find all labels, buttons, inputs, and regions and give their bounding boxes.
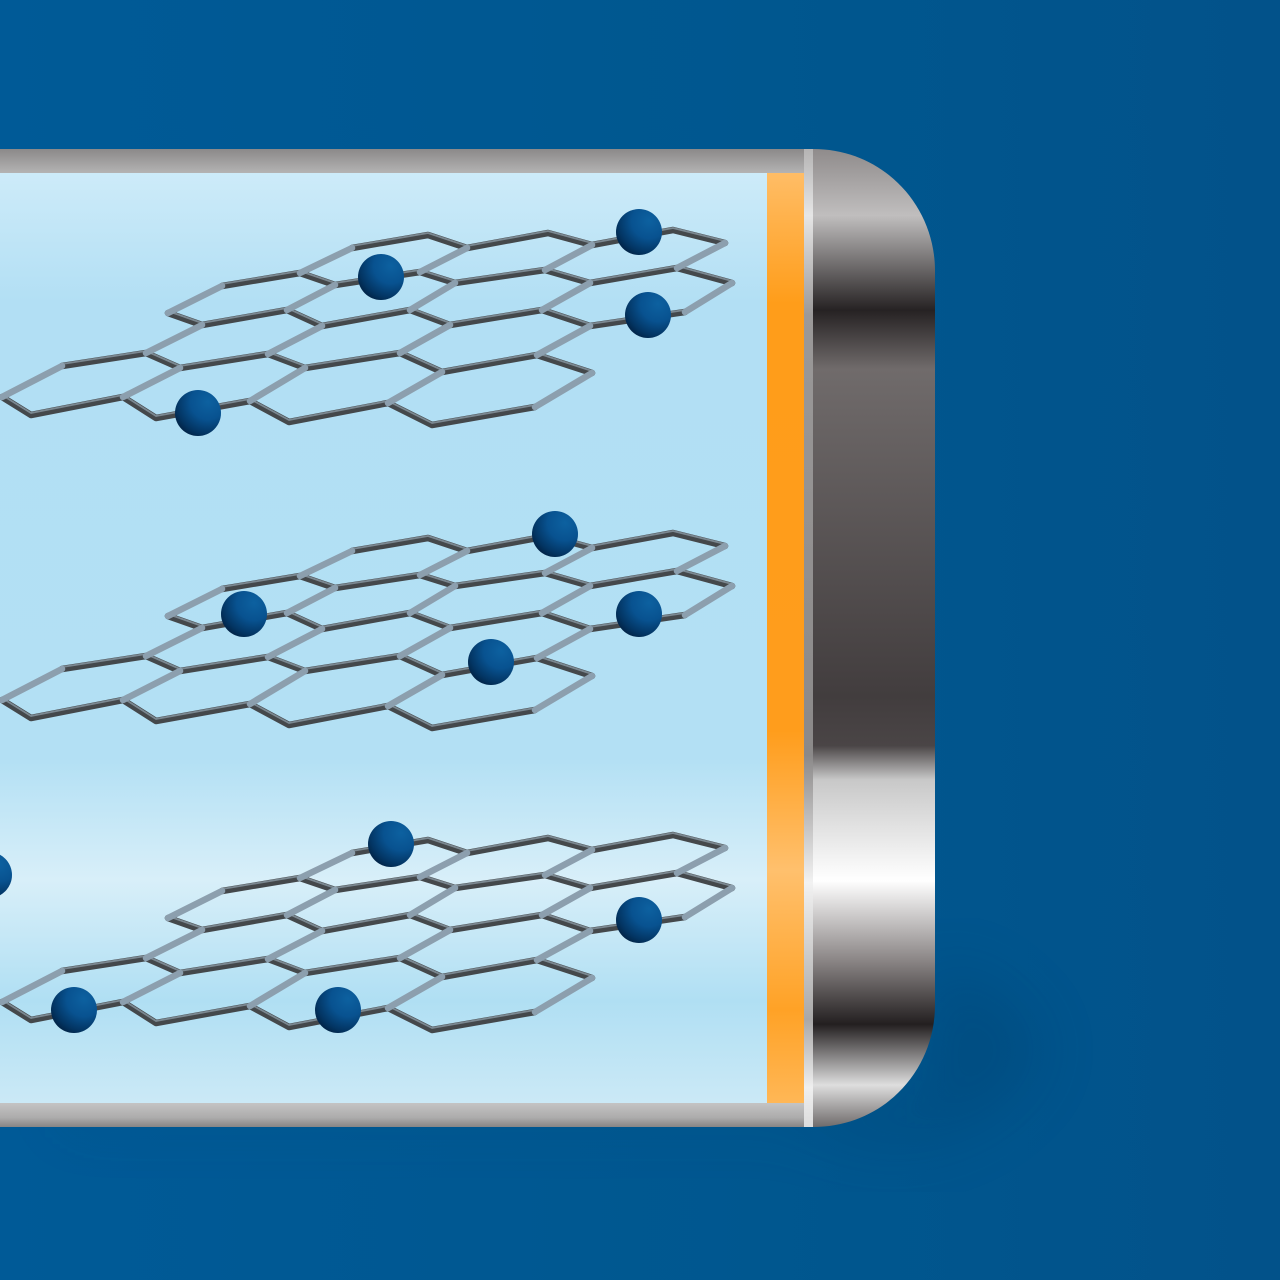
electrolyte interior [0, 173, 767, 1103]
tube drop shadow [60, 970, 1040, 1140]
bottom wall [0, 1103, 804, 1127]
top wall [0, 149, 804, 173]
ions layer 1 [175, 209, 671, 436]
graphene layer 2 with ions [2, 511, 732, 728]
orange current collector [767, 173, 804, 1103]
graphene layer 1 with ions [2, 209, 732, 436]
ions layer 2 [221, 511, 662, 685]
light separator strip [804, 149, 813, 1127]
battery tube [0, 149, 935, 1127]
metal end cap [813, 149, 935, 1127]
graphene layer 3 with ions [0, 821, 732, 1033]
ions layer 3 [0, 821, 662, 1033]
